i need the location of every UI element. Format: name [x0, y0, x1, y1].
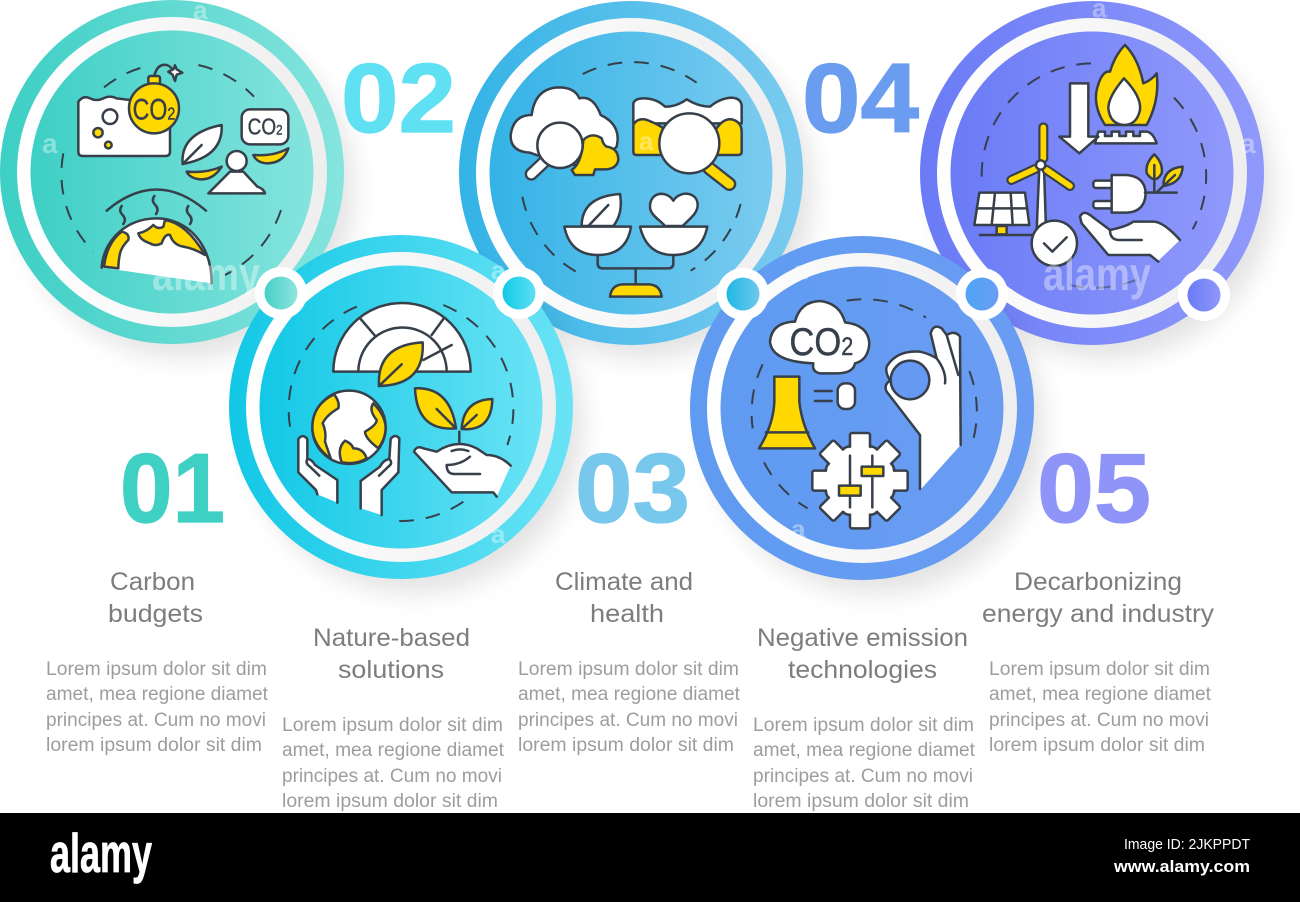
text: carbon budgets body: principes at. Cum no movi [46, 710, 266, 731]
heading: carbon budgets: budgets [108, 600, 203, 628]
watermarks: alamy [152, 248, 260, 300]
icon: negative emission technologies [752, 299, 977, 528]
text: carbon budgets body: lorem ipsum dolor sit dim [46, 735, 262, 756]
icon: gear with sliders [812, 433, 908, 528]
icon: carbon budgets: CO2 [248, 113, 283, 139]
heading: negative emission technologies [757, 624, 968, 684]
panel: carbon budgets circle [0, 0, 354, 358]
heading: nature-based solutions [313, 624, 470, 684]
text: decarbonizing energy body: principes at. Cum no movi [989, 710, 1209, 731]
text: nature-based solutions body: Lorem ipsum dolor sit dim [282, 715, 503, 736]
icon: nature-based solutions [289, 303, 513, 521]
heading: negative emission technologies: Negative emission [757, 624, 968, 652]
icon: decarbonizing energy [974, 45, 1206, 288]
watermarks: a [791, 514, 806, 544]
footer url: www.alamy.com [1113, 857, 1250, 876]
heading: negative emission technologies: technologies [788, 656, 937, 684]
footer bar [0, 813, 1300, 902]
icon: negative emission technologies: CO2 [789, 320, 853, 364]
heading: climate and health: health [590, 600, 664, 628]
text: climate and health body [518, 659, 741, 756]
connector dot 4 [956, 268, 1008, 320]
heading: decarbonizing energy and industry: energy and industry [982, 600, 1215, 628]
heading: decarbonizing energy and industry [982, 568, 1215, 628]
text: nature-based solutions body: lorem ipsum dolor sit dim [282, 791, 498, 812]
icon: carbon budgets: CO2 [133, 93, 175, 126]
text: carbon budgets body: Lorem ipsum dolor sit dim [46, 659, 267, 680]
panel: nature-based solutions circle [229, 235, 583, 593]
connector dot 5 [1178, 269, 1230, 321]
text: negative emission technologies body [753, 715, 976, 812]
panel: negative emission technologies circle [690, 236, 1044, 594]
heading: carbon budgets: Carbon [110, 568, 195, 596]
connector dot 1 [255, 267, 307, 319]
text: decarbonizing energy body: Lorem ipsum dolor sit dim [989, 659, 1210, 680]
number 05: 05 [1037, 433, 1151, 543]
heading: climate and health: Climate and [555, 568, 693, 596]
icon: carbon budgets [61, 65, 288, 283]
text: carbon budgets body: amet, mea regione diamet [46, 684, 269, 705]
text: carbon budgets body [46, 659, 269, 756]
number 02: 02 [341, 43, 456, 153]
watermarks: a [793, 255, 808, 285]
text: climate and health body: lorem ipsum dolor sit dim [518, 735, 734, 756]
heading: decarbonizing energy and industry: Decarbonizing [1014, 568, 1182, 596]
text: decarbonizing energy body: amet, mea regione diamet [989, 684, 1212, 705]
text: negative emission technologies body: amet, mea regione diamet [753, 740, 976, 761]
number 01: 01 [120, 433, 225, 543]
watermarks: alamy [1043, 248, 1151, 300]
watermarks: a [639, 126, 654, 156]
watermarks: a [491, 519, 506, 549]
watermarks: a [491, 255, 506, 285]
text: nature-based solutions body [282, 715, 505, 812]
connector dot 2 [493, 267, 545, 319]
footer image id: Image ID: 2JKPPDT [1124, 836, 1250, 853]
heading: climate and health [555, 568, 693, 628]
text: nature-based solutions body: amet, mea regione diamet [282, 740, 505, 761]
number 03: 03 [575, 433, 690, 543]
connector dot 3 [717, 268, 769, 320]
text: decarbonizing energy body [989, 659, 1212, 756]
panel: climate and health circle [459, 1, 813, 359]
watermarks: a [42, 128, 58, 159]
text: negative emission technologies body: Lorem ipsum dolor sit dim [753, 715, 974, 736]
footer logo: alamy [50, 822, 152, 884]
heading: nature-based solutions: solutions [338, 656, 444, 684]
text: nature-based solutions body: principes at. Cum no movi [282, 766, 502, 787]
text: climate and health body: principes at. Cum no movi [518, 710, 738, 731]
text: negative emission technologies body: principes at. Cum no movi [753, 766, 973, 787]
text: negative emission technologies body: lorem ipsum dolor sit dim [753, 791, 969, 812]
panel: decarbonizing energy circle [920, 1, 1274, 359]
number 04: 04 [802, 43, 919, 153]
text: climate and health body: Lorem ipsum dolor sit dim [518, 659, 739, 680]
watermarks: a [1240, 128, 1256, 159]
heading: nature-based solutions: Nature-based [313, 624, 470, 652]
watermarks [42, 0, 1256, 549]
text: decarbonizing energy body: lorem ipsum dolor sit dim [989, 735, 1205, 756]
heading: carbon budgets [108, 568, 203, 628]
text: climate and health body: amet, mea regione diamet [518, 684, 741, 705]
icon: climate and health [511, 62, 742, 297]
